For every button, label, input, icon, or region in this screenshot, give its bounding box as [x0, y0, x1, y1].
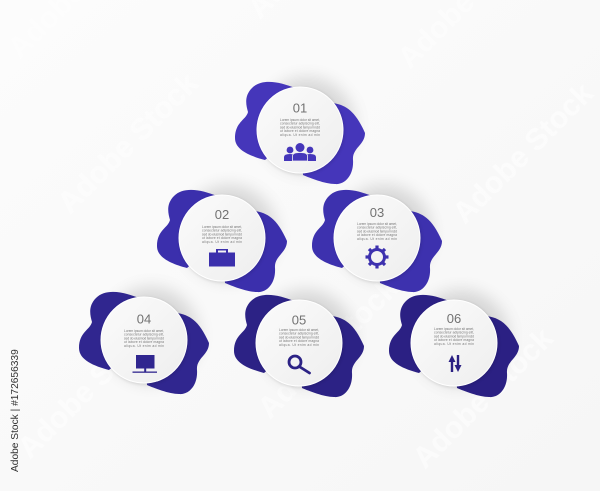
stock id side text: Adobe Stock | #172656339	[10, 349, 21, 472]
description 03: Lorem ipsum dolor sit amet,	[357, 222, 397, 226]
description 01: ut labore et dolore magna	[280, 129, 320, 133]
description 05: ut labore et dolore magna	[279, 339, 319, 343]
description 04: consectetur adipiscing elit,	[124, 333, 164, 337]
description 01: sed do eiusmod tempor incid	[280, 125, 320, 129]
white disc 06	[411, 300, 497, 386]
step 01 panel	[235, 77, 365, 184]
description 01: consectetur adipiscing elit,	[280, 122, 320, 126]
step 04 panel	[79, 287, 209, 394]
description 06: consectetur adipiscing elit,	[434, 331, 474, 335]
description 02: Lorem ipsum dolor sit amet,	[202, 225, 242, 229]
number 04: 04	[137, 312, 151, 326]
step 06 panel	[389, 290, 519, 397]
infographic canvas: Adobe Stock	[52, 67, 205, 220]
white disc 04	[101, 297, 187, 383]
description 01: Lorem ipsum dolor sit amet,	[280, 118, 320, 122]
number 05: 05	[292, 312, 306, 328]
infographic canvas: Adobe Stock	[252, 272, 405, 425]
number 01: 01	[293, 100, 307, 116]
infographic canvas: Adobe Stock	[12, 312, 165, 465]
step 03 panel	[312, 185, 442, 292]
description 06: Lorem ipsum dolor sit amet,	[434, 327, 474, 331]
blue petals 03	[312, 190, 442, 292]
infographic canvas: Adobe Stock	[407, 322, 560, 475]
icon: magnifying glass	[289, 356, 310, 373]
description 06	[434, 327, 474, 346]
description 05: Lorem ipsum dolor sit amet,	[279, 328, 319, 332]
description 03: ut labore et dolore magna	[357, 233, 397, 237]
description 02: ut labore et dolore magna	[202, 236, 242, 240]
icon: monitor	[132, 355, 157, 373]
white disc 03	[334, 195, 420, 281]
white disc 01	[257, 87, 343, 173]
step 02 panel	[157, 185, 287, 292]
number 06: 06	[447, 311, 461, 326]
number 03: 03	[370, 205, 384, 220]
description 05: consectetur adipiscing elit,	[279, 332, 319, 336]
description 06: aliqua. Ut enim ad min	[434, 342, 474, 346]
description 02: consectetur adipiscing elit,	[202, 229, 242, 233]
description 03: consectetur adipiscing elit,	[357, 226, 397, 230]
icon: up down arrows	[448, 355, 462, 372]
description 02	[202, 225, 242, 244]
step 05 panel	[234, 290, 364, 397]
description 01	[280, 118, 320, 137]
description 02: aliqua. Ut enim ad min	[202, 240, 242, 244]
description 02: sed do eiusmod tempor incid	[202, 232, 242, 236]
description 01: aliqua. Ut enim ad min	[280, 133, 320, 137]
description 04: ut labore et dolore magna	[124, 340, 164, 344]
description 04: sed do eiusmod tempor incid	[124, 336, 164, 340]
description 03	[357, 222, 397, 241]
description 04: aliqua. Ut enim ad min	[124, 344, 164, 348]
description 04: Lorem ipsum dolor sit amet,	[124, 329, 164, 333]
infographic canvas: Adobe Stock	[447, 77, 600, 230]
white disc 02	[179, 195, 265, 281]
blue petals 06	[389, 295, 519, 397]
blue petals 01	[235, 82, 365, 184]
number 02: 02	[215, 207, 229, 222]
description 05	[279, 328, 319, 347]
blue petals 05	[234, 295, 364, 397]
icon: briefcase	[209, 249, 235, 266]
icon: gear	[366, 246, 388, 268]
description 06: sed do eiusmod tempor incid	[434, 334, 474, 338]
icon: people	[284, 143, 316, 161]
description 03: aliqua. Ut enim ad min	[357, 237, 397, 241]
blue petals 02	[157, 190, 287, 292]
description 03: sed do eiusmod tempor incid	[357, 229, 397, 233]
description 05: aliqua. Ut enim ad min	[279, 343, 319, 347]
white disc 05	[256, 300, 342, 386]
description 05: sed do eiusmod tempor incid	[279, 335, 319, 339]
description 06: ut labore et dolore magna	[434, 338, 474, 342]
description 04	[124, 329, 164, 348]
blue petals 04	[79, 292, 209, 394]
